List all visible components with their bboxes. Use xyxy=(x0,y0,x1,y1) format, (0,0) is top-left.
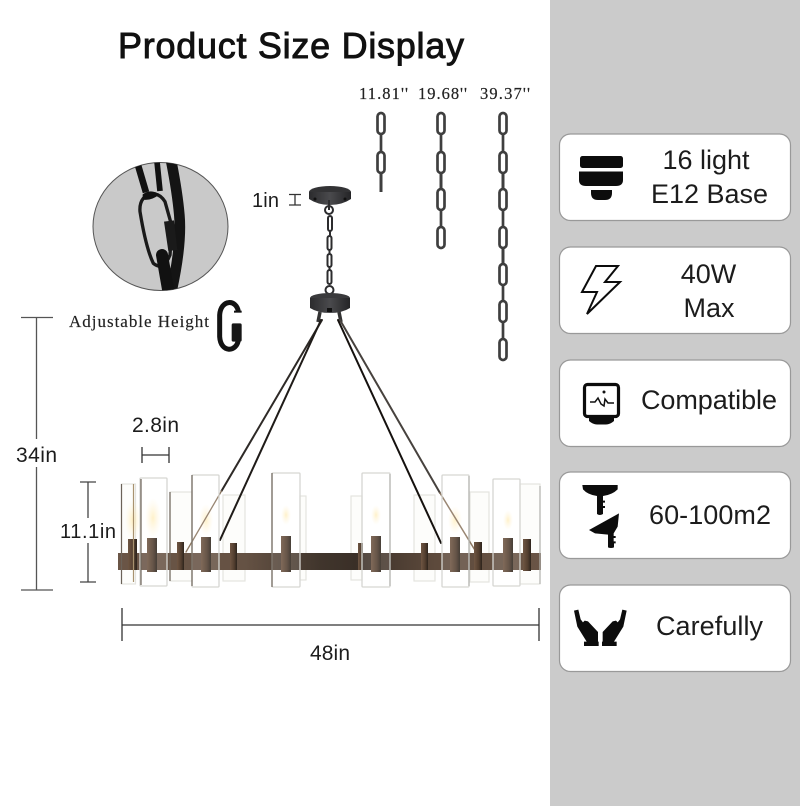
icon: ceiling lights xyxy=(582,485,619,548)
icon: caring hands xyxy=(574,610,627,646)
glass edge highlights xyxy=(122,473,540,587)
dimension: 48in: 48in xyxy=(310,642,350,665)
title: Product Size Display xyxy=(118,25,464,66)
text: 60-100m2: 60-100m2 xyxy=(649,500,771,530)
hub xyxy=(310,293,350,322)
label: 11.81 inch: 11.81'' xyxy=(359,84,408,103)
ceiling canopy xyxy=(309,186,351,205)
text: 40W Max: 40W xyxy=(681,259,737,289)
text: 16 light E12 Base xyxy=(651,145,768,209)
text: 40W Max: Max xyxy=(683,293,735,323)
chain detail magnifier xyxy=(93,158,228,295)
dimension: 2.8in: 2.8in xyxy=(132,414,179,437)
dimension: 1in xyxy=(252,190,301,212)
dimension: 1in: 1in xyxy=(252,190,279,212)
icon: bulb base xyxy=(579,156,623,200)
label: 19.68 inch: 19.68'' xyxy=(418,84,467,103)
grey side panel xyxy=(550,0,800,806)
dimension: 11.1in: 11.1in xyxy=(60,521,116,543)
text: 16 light E12 Base: 16 light xyxy=(662,145,750,175)
card: light count and base xyxy=(560,134,790,220)
label: 39.37 inch: 39.37'' xyxy=(480,84,530,103)
dimension: 48in xyxy=(122,608,539,665)
support arms xyxy=(186,320,477,553)
icon: carabiner xyxy=(220,303,242,349)
bulb glow xyxy=(125,498,513,540)
hanging chain xyxy=(325,200,334,294)
text: 16 light E12 Base: E12 Base xyxy=(651,179,768,209)
ring xyxy=(118,553,541,570)
text: Carefully: Carefully xyxy=(656,611,764,641)
chain: 11.81 inch xyxy=(378,113,384,192)
text: Compatible: Compatible xyxy=(641,385,777,415)
icon: dimmer screen xyxy=(584,384,618,424)
dimension: 34in xyxy=(16,318,57,590)
card: handle carefully xyxy=(560,585,790,672)
chandelier xyxy=(118,186,541,587)
chain: 39.37 inch xyxy=(500,113,506,360)
chain: 19.68 inch xyxy=(438,113,444,248)
dimension: 34in: 34in xyxy=(16,444,57,467)
dimension: 2.8in xyxy=(132,414,179,463)
card: coverage area xyxy=(560,472,790,558)
candle sockets xyxy=(128,536,531,572)
text: 40W Max xyxy=(681,259,737,323)
chain length options xyxy=(359,84,530,360)
icon: lightning bolt xyxy=(582,266,620,314)
front glass shades xyxy=(140,473,520,587)
adjustable height label: Adjustable Height xyxy=(69,312,209,331)
card: wattage xyxy=(560,247,790,334)
back glass shades xyxy=(122,484,540,584)
card: compatible xyxy=(560,360,790,446)
dimension: 11.1in xyxy=(60,482,116,582)
